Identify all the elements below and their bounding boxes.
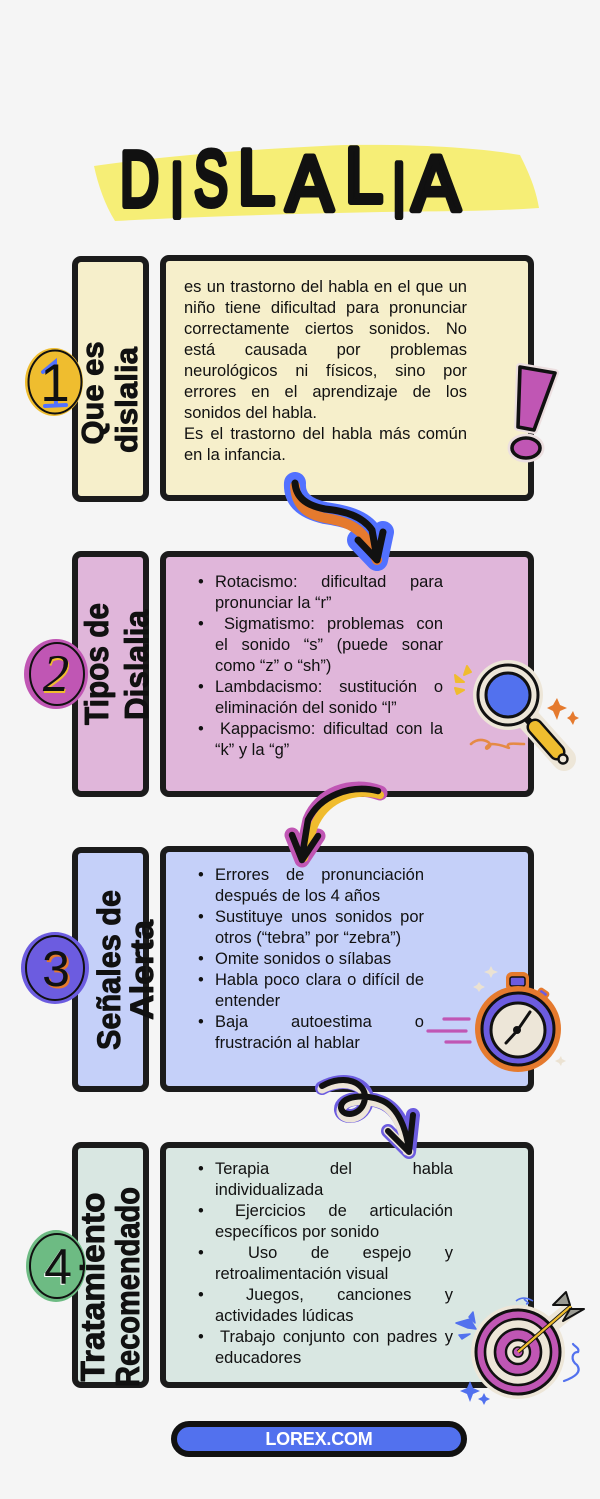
text block: lista de tratamientos: • <box>198 1244 204 1262</box>
text block: lista de senales: Habla poco clara o difícil de <box>215 971 424 989</box>
panel 2 body: tipos de dislalia <box>160 551 534 797</box>
badge 3: 3 <box>42 941 70 997</box>
badge 4: 4 <box>44 1239 72 1295</box>
panel 1 body: que es dislalia <box>160 255 534 501</box>
heading: tipos de dislalia: Dislalia <box>118 609 155 720</box>
text block: lista de senales <box>198 866 424 1052</box>
text block: lista de tratamientos: específicos por sonido <box>215 1223 379 1241</box>
text block: definicion: sonidos del habla. <box>184 404 317 422</box>
text block: lista de tratamientos: Ejercicios de articulación <box>235 1202 453 1220</box>
heading: tratamiento recomendado: Recomendado <box>109 1187 146 1387</box>
text block: lista de tipos: como “z” o “sh”) <box>215 657 331 675</box>
text block: lista de tratamientos: Uso de espejo y <box>248 1244 453 1262</box>
heading: tratamiento recomendado: Tratamiento <box>74 1192 111 1382</box>
text block: definicion: neurológicos ni físicos, sino por <box>184 362 467 380</box>
text block: lista de tratamientos <box>198 1160 453 1367</box>
badge 4: 4 <box>43 1240 71 1296</box>
text block: definicion: en la infancia. <box>184 446 286 464</box>
text block: lista de senales: Errores de pronunciación <box>215 866 424 884</box>
badge 2: 2 <box>43 645 69 703</box>
title: A <box>286 139 333 227</box>
text block: lista de tipos: • <box>198 573 204 591</box>
title: I <box>392 146 406 234</box>
text block: lista de tratamientos: actividades lúdicas <box>215 1307 354 1325</box>
title <box>120 131 463 234</box>
text block: definicion: niño tiene dificultad para pronunciar <box>184 299 467 317</box>
text block: lista de tratamientos: educadores <box>215 1349 301 1367</box>
panel 2 side label <box>72 551 149 797</box>
title highlight brush <box>94 144 539 221</box>
text block: lista de tipos: “k” y la “g” <box>215 741 289 759</box>
text block: lista de senales: • <box>198 908 204 926</box>
text block: definicion: Es el trastorno del habla más común <box>184 425 467 443</box>
title: S <box>194 134 228 222</box>
text block: lista de senales: entender <box>215 992 280 1010</box>
text block: lista de senales: Baja autoestima o <box>215 1013 424 1031</box>
text block: lista de senales: Sustituye unos sonidos por <box>215 908 424 926</box>
text block: lista de tratamientos: Juegos, canciones y <box>246 1286 453 1304</box>
heading: que es dislalia: Que es <box>75 342 110 444</box>
heading: que es dislalia: dislalia <box>109 346 144 453</box>
text block: lista de tipos: Rotacismo: dificultad para <box>215 573 443 591</box>
badge 3: 3 <box>44 943 72 999</box>
text block: lista de tipos <box>198 573 443 759</box>
text block: definicion: está causada por problemas <box>184 341 467 359</box>
text block: lista de senales: otros (“tebra” por “zebra”) <box>215 929 401 947</box>
text block: lista de senales: • <box>198 1013 204 1031</box>
heading: senales de alerta: Señales de <box>91 890 127 1050</box>
text block: lista de tipos: pronunciar la “r” <box>215 594 331 612</box>
footer button <box>171 1421 467 1457</box>
panel 3 body: senales de alerta <box>160 846 534 1092</box>
title: L <box>238 133 275 221</box>
text block: definicion <box>184 278 467 464</box>
text block: lista de tratamientos: Trabajo conjunto con padres y <box>220 1328 453 1346</box>
text block: lista de tipos: • <box>198 678 204 696</box>
text block: lista de tratamientos: • <box>198 1202 204 1220</box>
text block: lista de senales: frustración al hablar <box>215 1034 360 1052</box>
text block: lista de tipos: Kappacismo: dificultad con la <box>220 720 443 738</box>
panel 4 body: tratamiento recomendado <box>160 1142 534 1388</box>
text block: lista de tratamientos: Terapia del habla <box>215 1160 453 1178</box>
badge 2: 2 <box>44 647 70 705</box>
text block: lista de senales: después de los 4 años <box>215 887 380 905</box>
panel 1 side label <box>72 256 149 502</box>
footer text: LOREX.COM <box>265 1429 373 1449</box>
text block: definicion: correctamente ciertos sonidos. No <box>184 320 467 338</box>
panel 3 side label <box>72 847 149 1092</box>
text block: lista de senales: Omite sonidos o sílabas <box>215 950 391 968</box>
title: A <box>412 139 460 227</box>
text block: definicion: errores en el aprendizaje de los <box>184 383 467 401</box>
title: D <box>120 135 159 223</box>
text block: lista de tratamientos: • <box>198 1328 204 1346</box>
text block: lista de tipos: • <box>198 720 204 738</box>
text block: lista de tratamientos: individualizada <box>215 1181 323 1199</box>
panel 4 side label <box>72 1142 149 1388</box>
text block: lista de tipos: el sonido “s” (puede sonar <box>215 636 443 654</box>
heading: senales de alerta: Alerta <box>124 920 160 1020</box>
text block: lista de tipos: Lambdacismo: sustitución o <box>215 678 443 696</box>
text block: lista de tratamientos: • <box>198 1286 204 1304</box>
heading: tipos de dislalia: Tipos de <box>78 603 115 725</box>
badge 1: 1 <box>40 354 70 413</box>
title: L <box>345 131 383 219</box>
text block: lista de tratamientos: retroalimentación visual <box>215 1265 388 1283</box>
text block: lista de tratamientos: • <box>198 1160 204 1178</box>
text block: lista de tipos: • <box>198 615 204 633</box>
text block: lista de senales: • <box>198 866 204 884</box>
text block: lista de senales: • <box>198 950 204 968</box>
text block: lista de senales: • <box>198 971 204 989</box>
text block: definicion: es un trastorno del habla en el que un <box>184 278 467 296</box>
text block: lista de tipos: eliminación del sonido “l” <box>215 699 397 717</box>
text block: lista de tipos: Sigmatismo: problemas con <box>224 615 443 633</box>
title: I <box>170 146 184 234</box>
